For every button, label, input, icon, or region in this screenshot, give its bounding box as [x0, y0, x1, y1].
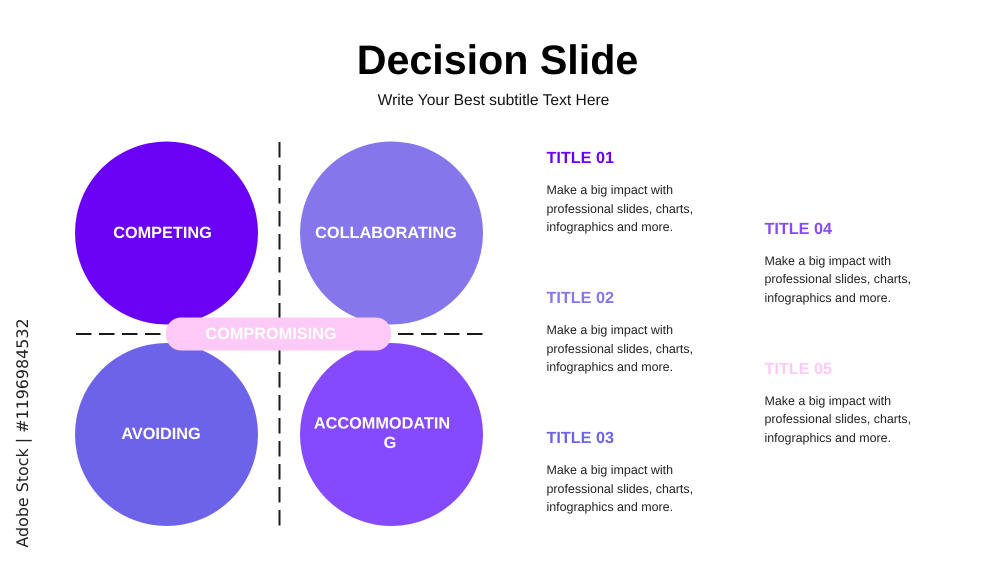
text block: title 02: TITLE 02	[546, 289, 614, 307]
text block: title 04: Make a big impact with	[764, 254, 891, 268]
text block: title 05: Make a big impact with	[764, 394, 891, 408]
stock image id: Adobe Stock | #1196984532	[13, 318, 32, 548]
circle: competing	[75, 142, 258, 324]
pill: compromising: COMPROMISING	[205, 325, 337, 343]
circle: collaborating	[300, 142, 483, 324]
subtitle: Write Your Best subtitle Text Here	[378, 92, 609, 109]
text block: title 01: TITLE 01	[546, 149, 614, 167]
circle: avoiding: AVOIDING	[121, 425, 201, 443]
text block: title 02: infographics and more.	[546, 360, 673, 374]
circle: collaborating: COLLABORATING	[315, 224, 457, 242]
text block: title 03: infographics and more.	[546, 500, 673, 514]
text block: title 02: Make a big impact with	[546, 323, 673, 337]
circle: accommodating: ACCOMMODATIN	[314, 414, 450, 432]
text block: title 05	[764, 360, 911, 445]
text block: title 01: professional slides, charts,	[546, 202, 693, 216]
circle: competing: COMPETING	[113, 224, 212, 242]
text block: title 03: professional slides, charts,	[546, 482, 693, 496]
circle: accommodating	[300, 343, 483, 526]
text block: title 03: TITLE 03	[546, 429, 614, 447]
text block: title 05: professional slides, charts,	[764, 412, 911, 426]
text block: title 03	[546, 429, 693, 514]
text block: title 02	[546, 289, 693, 374]
circle: avoiding	[75, 343, 258, 526]
text block: title 01: infographics and more.	[546, 220, 673, 234]
text block: title 05: infographics and more.	[764, 431, 891, 445]
pill: compromising	[166, 318, 391, 350]
title: Decision Slide	[357, 37, 638, 83]
text block: title 04: TITLE 04	[764, 220, 832, 238]
text block: title 04: professional slides, charts,	[764, 272, 911, 286]
text block: title 04	[764, 220, 911, 305]
text block: title 05: TITLE 05	[764, 360, 832, 378]
text block: title 04: infographics and more.	[764, 291, 891, 305]
circle: accommodating: G	[384, 434, 396, 452]
text block: title 03: Make a big impact with	[546, 463, 673, 477]
text block: title 01	[546, 149, 693, 234]
text block: title 01: Make a big impact with	[546, 183, 673, 197]
text block: title 02: professional slides, charts,	[546, 342, 693, 356]
decision matrix diagram	[75, 142, 483, 526]
